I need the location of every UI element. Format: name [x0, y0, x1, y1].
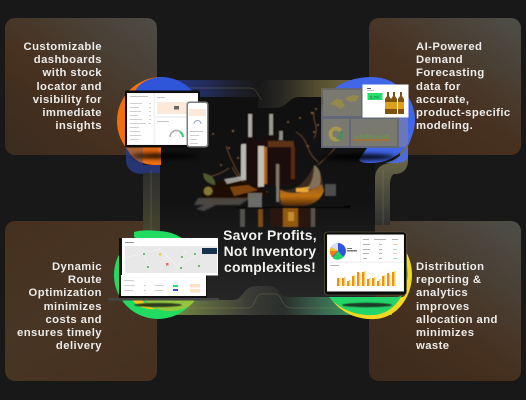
- text: demand forecasting: Demand: [416, 54, 463, 66]
- photo: bottle reflection: [240, 208, 316, 227]
- heading: centre slogan: complexities!: [224, 259, 316, 275]
- text: customizable dashboards: dashboards: [34, 54, 102, 66]
- text: route optimization: Route: [68, 274, 102, 286]
- tablet screen: [125, 90, 200, 148]
- beer bottles: [385, 92, 404, 114]
- text: route optimization: [17, 261, 102, 352]
- phone: [186, 102, 208, 148]
- text: distribution reporting: reporting &: [416, 274, 482, 286]
- centre dark panel: [160, 97, 375, 300]
- text: demand forecasting: [416, 41, 511, 132]
- text: demand forecasting: product-specific: [416, 107, 511, 119]
- text: demand forecasting: AI-Powered: [416, 41, 482, 53]
- gold band right: [375, 147, 408, 225]
- icon: dashboard on tablet and phone with orange circle: [117, 77, 208, 165]
- left vertical band: [143, 173, 160, 233]
- text: distribution reporting: minimizes: [416, 327, 474, 339]
- text: distribution reporting: waste: [416, 340, 450, 352]
- text: customizable dashboards: visibility for: [33, 94, 102, 106]
- text: route optimization: delivery: [56, 340, 102, 352]
- text: distribution reporting: Distribution: [416, 261, 484, 273]
- heading: centre slogan: Not Inventory: [224, 243, 316, 259]
- heading: centre slogan: [223, 227, 317, 275]
- splash streams: [205, 112, 337, 192]
- text: demand forecasting: Forecasting: [416, 67, 485, 79]
- text: customizable dashboards: locator and: [36, 81, 102, 93]
- ice cubes: [248, 193, 262, 207]
- text: route optimization: ensures timely: [17, 327, 102, 339]
- amber bottle: [258, 113, 295, 186]
- text: customizable dashboards: insights: [55, 120, 102, 132]
- leaf: [203, 173, 215, 185]
- text: distribution reporting: improves: [416, 301, 470, 313]
- laptop: [119, 238, 207, 298]
- tablet: [324, 232, 406, 295]
- text: customizable dashboards: with stock: [43, 67, 102, 79]
- gold band top right: [258, 80, 385, 108]
- photo: whisky bottles and splash: [194, 108, 350, 211]
- text: distribution reporting: [416, 261, 498, 352]
- text: distribution reporting: analytics: [416, 287, 468, 299]
- icon: demand forecasting dashboard with blue circle: 0.2%: [370, 94, 380, 100]
- text: customizable dashboards: [24, 41, 102, 132]
- panel: distribution reporting card: [369, 221, 521, 381]
- text: route optimization: minimizes: [44, 301, 102, 313]
- text: distribution reporting: allocation and: [416, 314, 498, 326]
- text: route optimization: costs and: [45, 314, 102, 326]
- green bottom band: [150, 286, 392, 315]
- text: demand forecasting: data for: [416, 81, 461, 93]
- text: demand forecasting: modeling.: [416, 120, 473, 132]
- panel: customizable dashboards card: [5, 18, 157, 155]
- panel: demand forecasting card: [369, 18, 521, 155]
- map card: [122, 238, 218, 276]
- glass with whisky: [277, 165, 324, 206]
- icon: demand forecasting dashboard with blue circle: [320, 77, 415, 163]
- bar chart: [337, 272, 394, 286]
- icon: route optimization laptop with green circle: [108, 230, 219, 319]
- text: route optimization: Optimization: [29, 287, 102, 299]
- spill on table: [194, 198, 250, 211]
- blue band left: [126, 147, 160, 174]
- text: customizable dashboards: immediate: [42, 107, 102, 119]
- text: customizable dashboards: Customizable: [24, 41, 102, 53]
- blue band top left: [140, 80, 258, 97]
- thin gold lines: [140, 88, 392, 308]
- heading: centre slogan: Savor Profits,: [223, 227, 317, 243]
- dark bottle: [240, 113, 263, 186]
- text: demand forecasting: accurate,: [416, 94, 469, 106]
- pie chart: [330, 243, 346, 259]
- band frame around the centre: [126, 80, 408, 315]
- dashboard panel: [321, 88, 399, 148]
- text: route optimization: Dynamic: [52, 261, 102, 273]
- fallen bottle: [201, 179, 270, 203]
- product card: [362, 84, 408, 118]
- icon: distribution analytics tablet with yellow circle: [324, 232, 412, 319]
- panel: route optimization card: [5, 221, 157, 381]
